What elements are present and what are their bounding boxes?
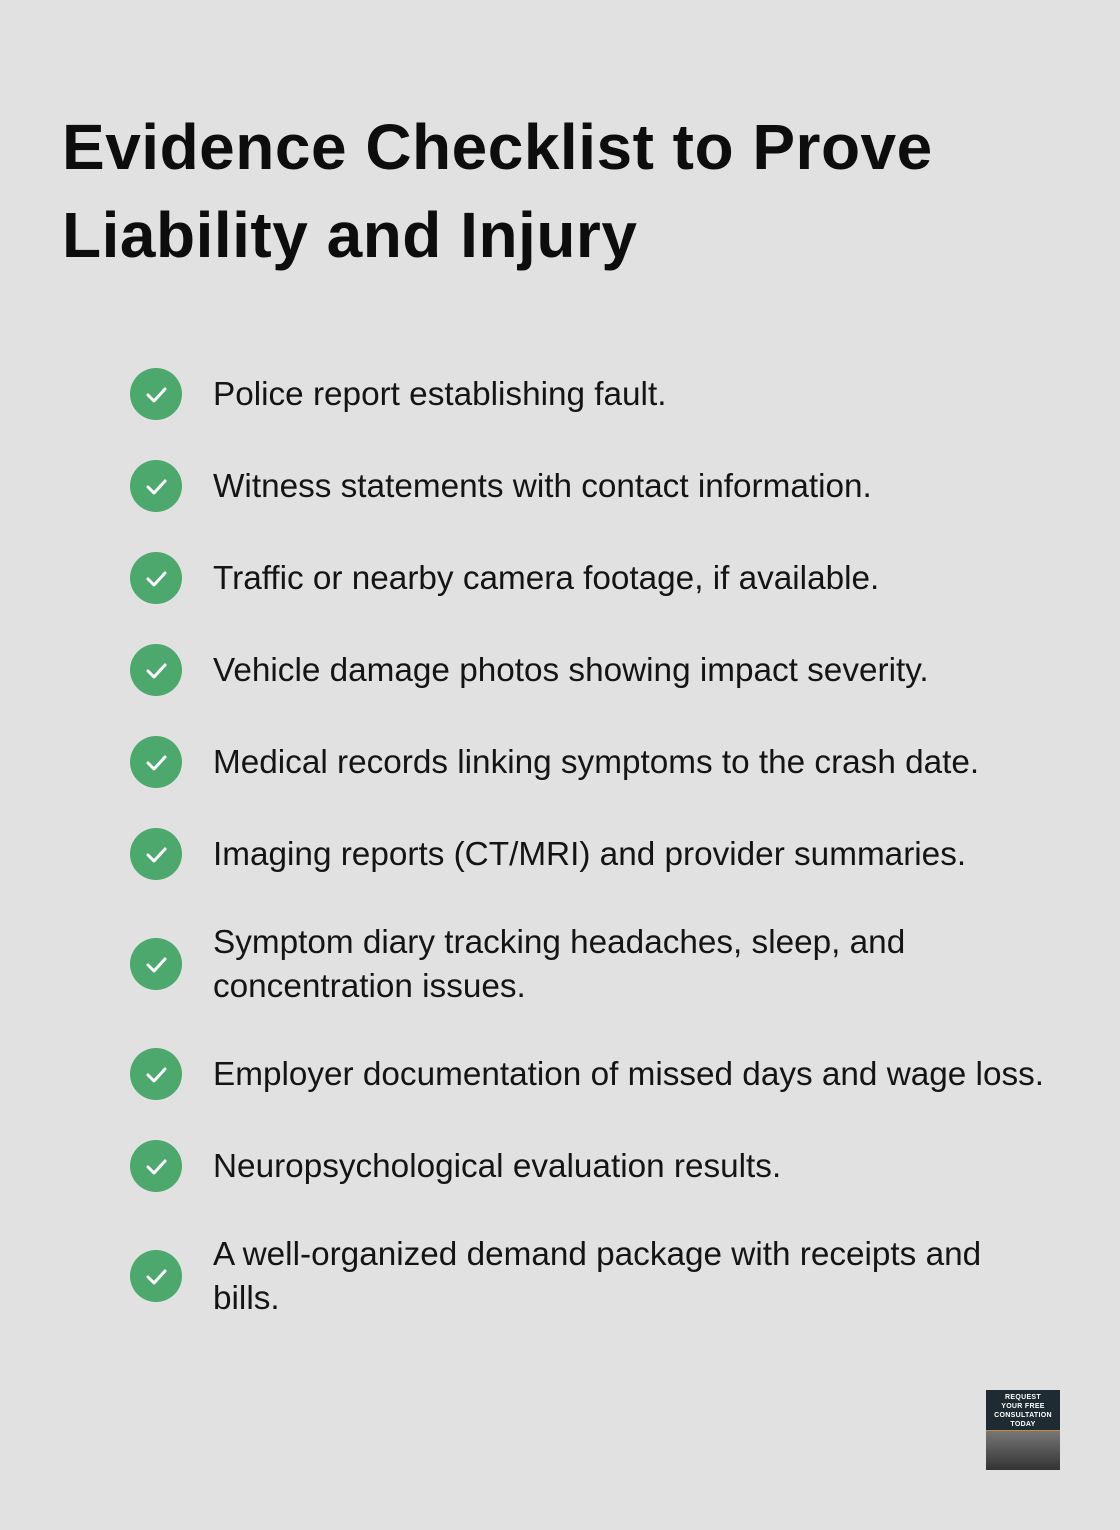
title xyxy=(62,111,933,271)
item 1: Police report establishing fault. xyxy=(213,376,666,413)
item 8: Employer documentation of missed days and wage loss. xyxy=(213,1056,1044,1093)
badge: consultation xyxy=(986,1390,1060,1470)
item 7: Symptom diary tracking headaches, sleep, and xyxy=(213,924,905,961)
badge: consultation: YOUR FREE xyxy=(1001,1403,1045,1410)
item 3 xyxy=(130,552,879,604)
item 5: Medical records linking symptoms to the crash date. xyxy=(213,744,979,781)
item 7 xyxy=(130,924,905,1005)
item 10 xyxy=(130,1236,981,1317)
badge: consultation: TODAY xyxy=(1010,1421,1036,1428)
item 3: Traffic or nearby camera footage, if available. xyxy=(213,560,879,597)
item 2: Witness statements with contact information. xyxy=(213,468,872,505)
title: Liability and Injury xyxy=(62,199,637,271)
badge: consultation: CONSULTATION xyxy=(994,1412,1052,1419)
item 2 xyxy=(130,460,872,512)
badge: consultation: REQUEST xyxy=(1005,1394,1041,1401)
item 1 xyxy=(130,368,666,420)
item 4 xyxy=(130,644,929,696)
item 6 xyxy=(130,828,966,880)
item 10: bills. xyxy=(213,1280,280,1317)
item 6: Imaging reports (CT/MRI) and provider summaries. xyxy=(213,836,966,873)
item 9: Neuropsychological evaluation results. xyxy=(213,1148,781,1185)
item 5 xyxy=(130,736,979,788)
item 9 xyxy=(130,1140,781,1192)
item 7: concentration issues. xyxy=(213,968,526,1005)
item 4: Vehicle damage photos showing impact severity. xyxy=(213,652,929,689)
item 10: A well-organized demand package with receipts and xyxy=(213,1236,981,1273)
item 8 xyxy=(130,1048,1044,1100)
title: Evidence Checklist to Prove xyxy=(62,111,933,183)
